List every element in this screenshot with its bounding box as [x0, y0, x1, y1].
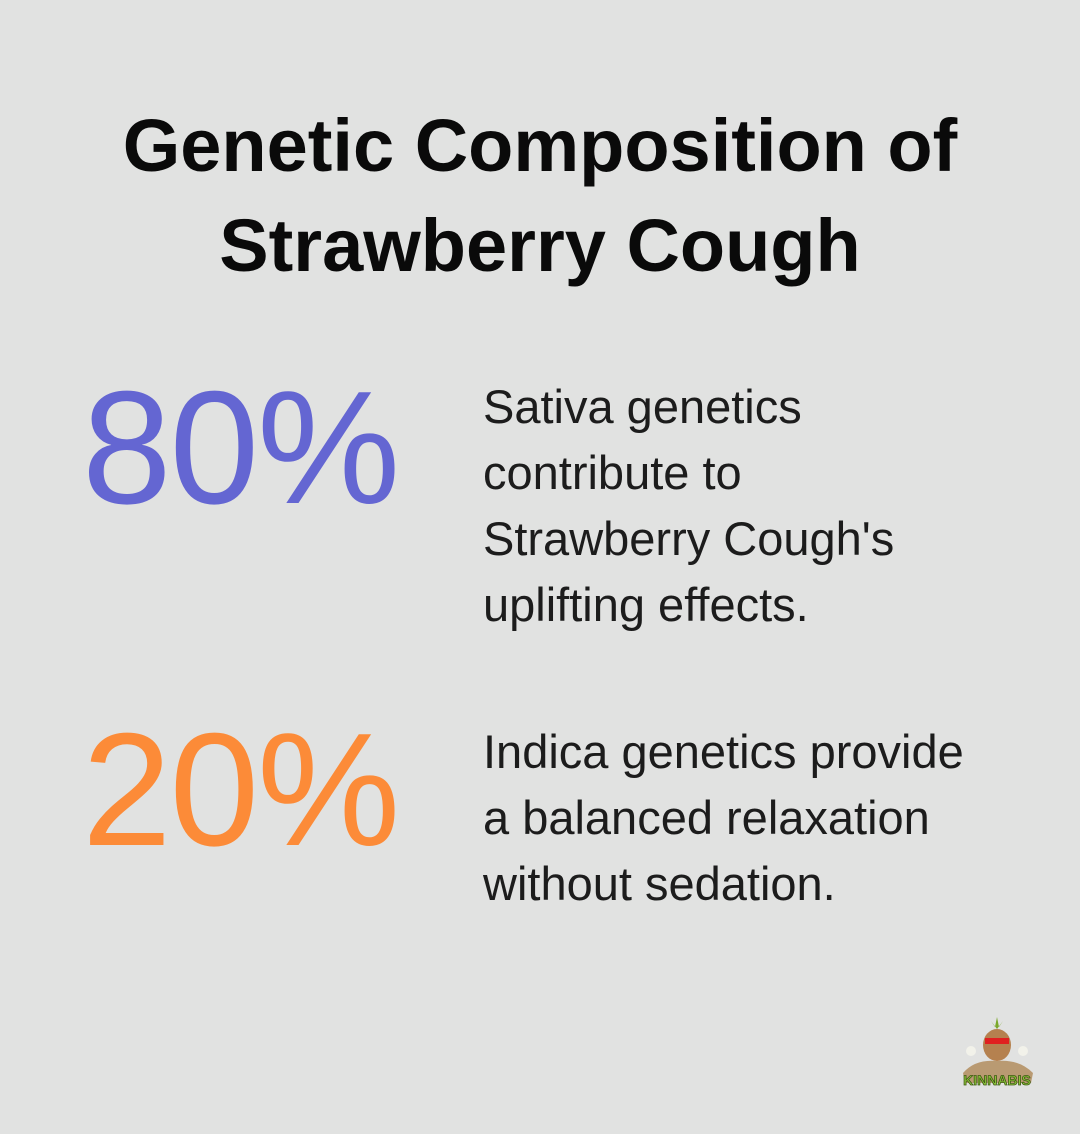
- text: indica description: without sedation.: [483, 857, 836, 910]
- title: Genetic Composition of: [123, 104, 957, 187]
- stat: 80% sativa: 80%: [82, 358, 398, 538]
- logo: Kinnabis mascot: [963, 1017, 1033, 1088]
- text: sativa description: contribute to: [483, 446, 742, 499]
- title: Strawberry Cough: [219, 204, 861, 287]
- text: sativa description: Sativa genetics: [483, 380, 802, 433]
- text: indica description: a balanced relaxation: [483, 791, 930, 844]
- text: sativa description: Strawberry Cough's: [483, 512, 894, 565]
- stat: 20% indica: 20%: [82, 700, 398, 880]
- text: sativa description: [483, 380, 894, 631]
- text: sativa description: uplifting effects.: [483, 578, 809, 631]
- text: indica description: [483, 725, 964, 910]
- logo: Kinnabis mascot: KINNABIS: [963, 1072, 1031, 1088]
- title: [123, 104, 958, 287]
- text: indica description: Indica genetics provide: [483, 725, 964, 778]
